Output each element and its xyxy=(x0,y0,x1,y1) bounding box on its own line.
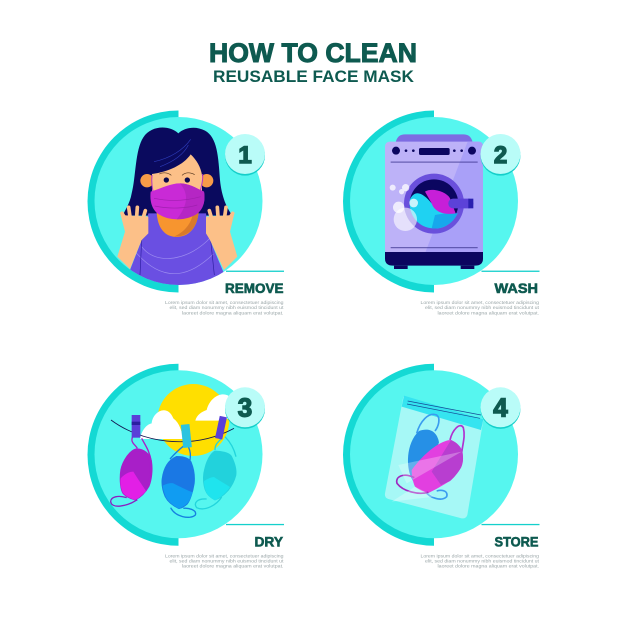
label: remove: REMOVE xyxy=(225,281,284,296)
badge: number 1: 1 xyxy=(238,142,252,169)
badge: number 4 xyxy=(480,387,540,525)
illustration: masks drying on a line xyxy=(111,384,236,517)
badge: number 3: 3 xyxy=(238,392,252,422)
title: REUSABLE FACE MASK xyxy=(213,67,415,86)
badge: number 4: 4 xyxy=(493,392,508,422)
description text xyxy=(420,553,540,569)
illustration: washing machine xyxy=(385,134,483,269)
label: store: STORE xyxy=(494,534,538,549)
description text xyxy=(165,300,284,315)
title xyxy=(209,38,417,86)
illustration: masks in a zip bag xyxy=(385,396,483,518)
description text xyxy=(165,553,284,569)
label: wash: WASH xyxy=(494,281,538,296)
description text xyxy=(420,300,540,315)
panel: step 1 remove xyxy=(88,110,284,315)
label: dry: DRY xyxy=(254,534,283,549)
badge: number 3 xyxy=(225,387,284,525)
title: HOW TO CLEAN xyxy=(209,38,417,68)
panel: step 4 store xyxy=(343,364,540,569)
badge: number 2 xyxy=(480,134,540,272)
illustration: woman removing mask xyxy=(117,128,237,290)
panel: step 3 dry xyxy=(88,364,284,569)
panel: step 2 wash xyxy=(343,110,540,315)
badge: number 1 xyxy=(225,134,284,272)
badge: number 2: 2 xyxy=(494,142,507,169)
